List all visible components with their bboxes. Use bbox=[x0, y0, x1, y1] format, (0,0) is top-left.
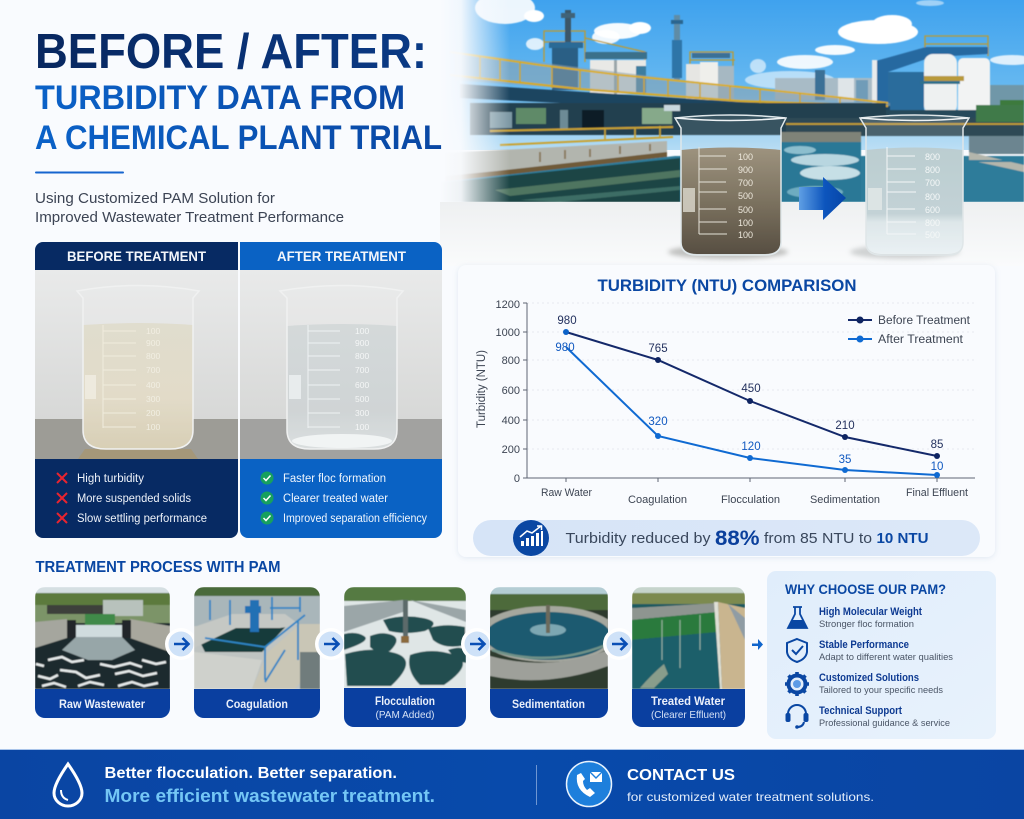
beaker: clear water: 800 bbox=[925, 218, 940, 228]
after data labels: 10 bbox=[931, 461, 943, 473]
footer slogan: Better flocculation. Better separation. bbox=[104, 765, 397, 782]
icon: water drop bbox=[54, 764, 82, 806]
panel: after treatment: 600 bbox=[355, 380, 369, 390]
panel: why choose our PAM bbox=[767, 571, 996, 739]
icon: contact phone and mail bbox=[566, 762, 612, 806]
footer slogan: More efficient wastewater treatment. bbox=[104, 786, 435, 806]
arrow: before to after bbox=[799, 177, 846, 220]
after data labels: 120 bbox=[741, 441, 761, 453]
panel: before treatment: 100 bbox=[146, 326, 160, 336]
arrow: step 3 to 4 bbox=[461, 628, 493, 660]
before treatment list: High turbidity bbox=[77, 473, 144, 485]
panel: turbidity chart bbox=[458, 265, 995, 557]
before treatment list: Slow settling performance bbox=[77, 513, 207, 525]
process step: coagulation: Coagulation bbox=[226, 699, 288, 711]
after data labels bbox=[555, 342, 943, 473]
process step: flocculation bbox=[344, 587, 466, 727]
heading: before treatment: BEFORE TREATMENT bbox=[67, 248, 206, 264]
panel: before treatment bbox=[35, 242, 238, 538]
x axis labels bbox=[541, 487, 968, 506]
panel: before treatment: 800 bbox=[146, 351, 160, 361]
upper walkway bbox=[470, 57, 890, 107]
after treatment list: Faster floc formation bbox=[283, 473, 386, 485]
legend: After Treatment bbox=[878, 334, 964, 346]
icon: headset bbox=[786, 705, 808, 729]
panel: after treatment bbox=[240, 242, 442, 538]
subtitle: Improved Wastewater Treatment Performance bbox=[35, 210, 344, 226]
panel: after treatment: 300 bbox=[355, 408, 369, 418]
title: BEFORE / AFTER: bbox=[35, 25, 427, 79]
x axis labels: Final Effluent bbox=[906, 487, 968, 499]
before data labels: 980 bbox=[557, 315, 577, 327]
icon: gear bbox=[785, 672, 809, 696]
footer contact text: for customized water treatment solutions. bbox=[627, 790, 874, 804]
before data labels: 765 bbox=[648, 343, 668, 355]
after treatment list bbox=[283, 473, 427, 525]
beaker: dirty water: 100 bbox=[738, 230, 753, 240]
icon: shield bbox=[787, 639, 807, 662]
x axis labels: Raw Water bbox=[541, 487, 592, 499]
beaker: clear water: 800 bbox=[925, 152, 940, 162]
process step: flocculation: (PAM Added) bbox=[376, 709, 434, 721]
text: technical support bbox=[819, 705, 950, 729]
beaker: clear water: 500 bbox=[925, 230, 940, 240]
arrow: process to why panel bbox=[752, 639, 763, 650]
process step: raw wastewater bbox=[35, 587, 170, 718]
arrow: step 4 to 5 bbox=[603, 628, 635, 660]
callout text: 88% bbox=[715, 527, 760, 550]
hero table surface bbox=[440, 202, 1024, 266]
text: customized solutions: Customized Solutions bbox=[819, 672, 919, 684]
beaker: dirty water bbox=[668, 115, 788, 259]
before series line bbox=[563, 329, 940, 459]
arrow: step 1 to 2 bbox=[165, 628, 197, 660]
panel: before treatment: 700 bbox=[146, 365, 160, 375]
legend bbox=[848, 315, 971, 346]
before treatment list bbox=[77, 473, 207, 525]
icon: green checks bbox=[260, 472, 274, 524]
panel: after treatment: 500 bbox=[355, 394, 369, 404]
y axis labels: 600 bbox=[502, 385, 520, 397]
arrow: step 2 to 3 bbox=[315, 628, 347, 660]
panel: after treatment: 900 bbox=[355, 338, 369, 348]
callout text: 10 NTU bbox=[876, 530, 928, 547]
callout text: Turbidity reduced by bbox=[566, 530, 711, 547]
beaker: dirty water: 900 bbox=[738, 165, 753, 175]
process step: treated water: Treated Water bbox=[651, 696, 725, 708]
y axis labels: 0 bbox=[514, 473, 520, 485]
y axis labels: 1200 bbox=[496, 299, 520, 311]
panel: before treatment: 200 bbox=[146, 408, 160, 418]
y axis labels bbox=[496, 299, 520, 485]
x axis labels: Coagulation bbox=[628, 494, 687, 506]
panel: before treatment: 100 bbox=[146, 422, 160, 432]
x axis labels: Flocculation bbox=[721, 494, 780, 506]
panel: before treatment: 400 bbox=[146, 380, 160, 390]
footer contact text: CONTACT US bbox=[627, 767, 735, 784]
y axis title: Turbidity (NTU) bbox=[476, 350, 488, 428]
y axis labels: 1000 bbox=[496, 327, 520, 339]
panel: before treatment: 300 bbox=[146, 394, 160, 404]
after series line bbox=[566, 347, 940, 478]
after data labels: 35 bbox=[839, 454, 851, 466]
panel: after treatment: 100 bbox=[355, 326, 369, 336]
y axis labels: 800 bbox=[502, 355, 520, 367]
text: customized solutions bbox=[819, 672, 943, 696]
hero photo: chemical plant bbox=[440, 0, 1024, 202]
title: TURBIDITY DATA FROM bbox=[35, 79, 405, 117]
before data labels: 85 bbox=[931, 439, 943, 451]
heading: after treatment: AFTER TREATMENT bbox=[277, 248, 406, 264]
text: high molecular weight bbox=[819, 606, 922, 630]
icon: rising chart bbox=[513, 520, 549, 556]
under structure bbox=[470, 103, 886, 135]
before data labels: 210 bbox=[835, 420, 855, 432]
text: stable performance: Stable Performance bbox=[819, 639, 909, 651]
footer contact text bbox=[627, 767, 874, 804]
before data labels bbox=[557, 315, 943, 451]
y axis labels: 400 bbox=[502, 415, 520, 427]
process step: coagulation bbox=[194, 587, 320, 718]
left frames bbox=[544, 31, 988, 72]
right plant bbox=[876, 46, 989, 106]
title bbox=[35, 25, 442, 157]
process step: treated water: (Clearer Effluent) bbox=[651, 709, 726, 721]
callout text bbox=[566, 527, 928, 550]
panel: after treatment: 100 bbox=[355, 422, 369, 432]
beaker: dirty water: 100 bbox=[738, 218, 753, 228]
panel: before treatment: 900 bbox=[146, 338, 160, 348]
x axis labels: Sedimentation bbox=[810, 494, 880, 506]
panel: after treatment: 800 bbox=[355, 351, 369, 361]
process step: sedimentation: Sedimentation bbox=[512, 699, 585, 711]
process step: sedimentation bbox=[490, 587, 608, 718]
text: stable performance bbox=[819, 639, 953, 663]
beaker: dirty water: 100 bbox=[738, 152, 753, 162]
icon: flask bbox=[788, 607, 807, 628]
heading: why choose: WHY CHOOSE OUR PAM? bbox=[785, 582, 946, 597]
y axis labels: 200 bbox=[502, 444, 520, 456]
text: high molecular weight: Stronger floc formation bbox=[819, 619, 914, 630]
beaker: clear water: 600 bbox=[925, 205, 940, 215]
text: technical support: Professional guidance & service bbox=[819, 718, 950, 729]
chart title: TURBIDITY (NTU) COMPARISON bbox=[598, 276, 856, 295]
after data labels: 320 bbox=[648, 416, 668, 428]
before treatment list: More suspended solids bbox=[77, 493, 191, 505]
footer slogan bbox=[104, 765, 435, 806]
beaker: clear water: 800 bbox=[925, 192, 940, 202]
concrete wall bbox=[464, 140, 668, 174]
beaker: clear water: 700 bbox=[925, 178, 940, 188]
text: customized solutions: Tailored to your specific needs bbox=[819, 685, 943, 696]
far plant bbox=[775, 78, 875, 100]
process step: raw wastewater: Raw Wastewater bbox=[59, 699, 145, 711]
water bbox=[440, 156, 1024, 202]
beaker: dirty water: 700 bbox=[738, 178, 753, 188]
after treatment list: Clearer treated water bbox=[283, 493, 388, 505]
beaker: dirty water: 500 bbox=[738, 205, 753, 215]
beaker: clear water bbox=[850, 115, 969, 259]
title: A CHEMICAL PLANT TRIAL bbox=[35, 119, 442, 157]
text: high molecular weight: High Molecular Weight bbox=[819, 606, 922, 618]
callout text: from 85 NTU to bbox=[764, 530, 872, 547]
legend: Before Treatment bbox=[878, 315, 971, 327]
callout: turbidity reduced bbox=[473, 520, 980, 556]
subtitle bbox=[35, 191, 344, 226]
process step: treated water bbox=[632, 587, 745, 727]
process step: flocculation: Flocculation bbox=[375, 696, 435, 708]
footer band bbox=[0, 749, 1024, 819]
heading: treatment process: TREATMENT PROCESS WITH PAM bbox=[36, 559, 280, 576]
subtitle: Using Customized PAM Solution for bbox=[35, 191, 275, 207]
text: technical support: Technical Support bbox=[819, 705, 902, 717]
panel: after treatment: 700 bbox=[355, 365, 369, 375]
beaker: dirty water: 500 bbox=[738, 191, 753, 201]
before data labels: 450 bbox=[741, 383, 761, 395]
beaker: clear water: 800 bbox=[925, 165, 940, 175]
text: stable performance: Adapt to different water qualities bbox=[819, 652, 953, 663]
after treatment list: Improved separation efficiency bbox=[283, 513, 427, 525]
icon: red crosses bbox=[57, 473, 67, 523]
after data labels: 980 bbox=[555, 342, 575, 354]
